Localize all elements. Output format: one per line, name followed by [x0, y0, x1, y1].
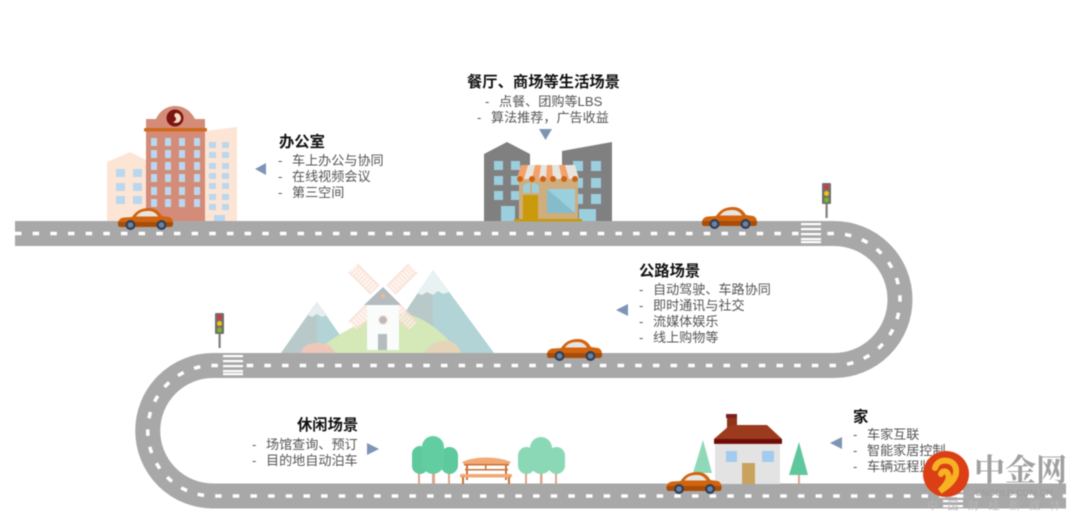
traffic light middle left — [215, 313, 224, 348]
icon: house — [693, 414, 808, 484]
text block: highway: - — [639, 282, 643, 297]
text block: highway: 自动驾驶、车路协同 — [653, 281, 771, 297]
text block: office: 第三空间 — [292, 184, 344, 200]
car on office road — [118, 208, 173, 230]
text block: highway: - — [639, 298, 643, 313]
traffic light top right — [822, 183, 831, 218]
text block: home — [853, 408, 946, 474]
text block: restaurants and malls: - — [477, 110, 481, 125]
text block: highway: 公路场景 — [639, 262, 700, 280]
text block: office: - — [278, 185, 282, 200]
watermark: wordmark — [927, 453, 1070, 512]
text block: restaurants and malls — [467, 73, 620, 125]
text block: highway: 线上购物等 — [653, 329, 718, 345]
text block: home: 智能家居控制 — [867, 442, 946, 458]
text block: restaurants and malls: 算法推荐，广告收益 — [491, 110, 609, 125]
text block: highway — [639, 262, 771, 345]
text block: office: - — [278, 169, 282, 184]
text block: home: - — [853, 427, 857, 442]
text block: office: 车上办公与协同 — [292, 152, 384, 168]
text block: office: 办公室 — [279, 133, 325, 151]
car on bottom road — [666, 472, 722, 494]
text block: restaurants and malls: 餐厅、商场等生活场景 — [467, 73, 620, 91]
car on upper right road — [702, 207, 757, 229]
text block: home: - — [853, 459, 857, 474]
text block: home: 家 — [853, 408, 868, 426]
text block: home: - — [853, 443, 857, 458]
arrow: office — [255, 163, 266, 175]
text block: restaurants and malls: - — [485, 94, 489, 109]
winding road — [15, 234, 1066, 496]
watermark: logo — [923, 451, 969, 497]
icon: shops and buildings — [484, 142, 612, 222]
text block: leisure: - — [252, 453, 256, 468]
text block: home: 车辆远程监控 — [867, 458, 946, 474]
watermark: wordmark: CNGOLD.COM.CN — [975, 488, 1053, 498]
arrow: home — [830, 437, 842, 449]
text block: highway: - — [639, 330, 643, 345]
text block: leisure: 休闲场景 — [297, 416, 358, 434]
crosswalk top right — [799, 222, 822, 245]
text block: leisure: 目的地自动泊车 — [266, 452, 358, 468]
arrow: highway — [616, 304, 628, 316]
text block: highway: - — [639, 314, 643, 329]
text block: restaurants and malls: 点餐、团购等LBS — [499, 93, 603, 109]
arrow: restaurants — [539, 129, 552, 140]
icon: office buildings — [107, 106, 237, 221]
text block: leisure — [252, 416, 358, 468]
watermark: wordmark: 中金网 — [974, 453, 1067, 488]
text block: highway: 即时通讯与社交 — [653, 297, 745, 313]
text block: office — [278, 133, 384, 200]
text block: highway: 流媒体娱乐 — [653, 314, 718, 329]
icon: trees and bench — [412, 436, 565, 484]
text block: leisure: - — [252, 437, 256, 452]
text block: leisure: 场馆查询、预订 — [266, 437, 358, 452]
arrow: leisure — [367, 443, 379, 455]
icon: windmill and mountains — [281, 268, 494, 353]
text block: office: 在线视频会议 — [292, 169, 371, 184]
car on middle road — [547, 339, 602, 361]
crosswalk middle left — [221, 354, 245, 377]
watermark: wordmark: 中国财经新媒体 — [927, 498, 1070, 512]
crosswalk bottom right — [943, 490, 963, 507]
text block: office: - — [278, 153, 282, 168]
text block: home: 车家互联 — [867, 426, 919, 442]
